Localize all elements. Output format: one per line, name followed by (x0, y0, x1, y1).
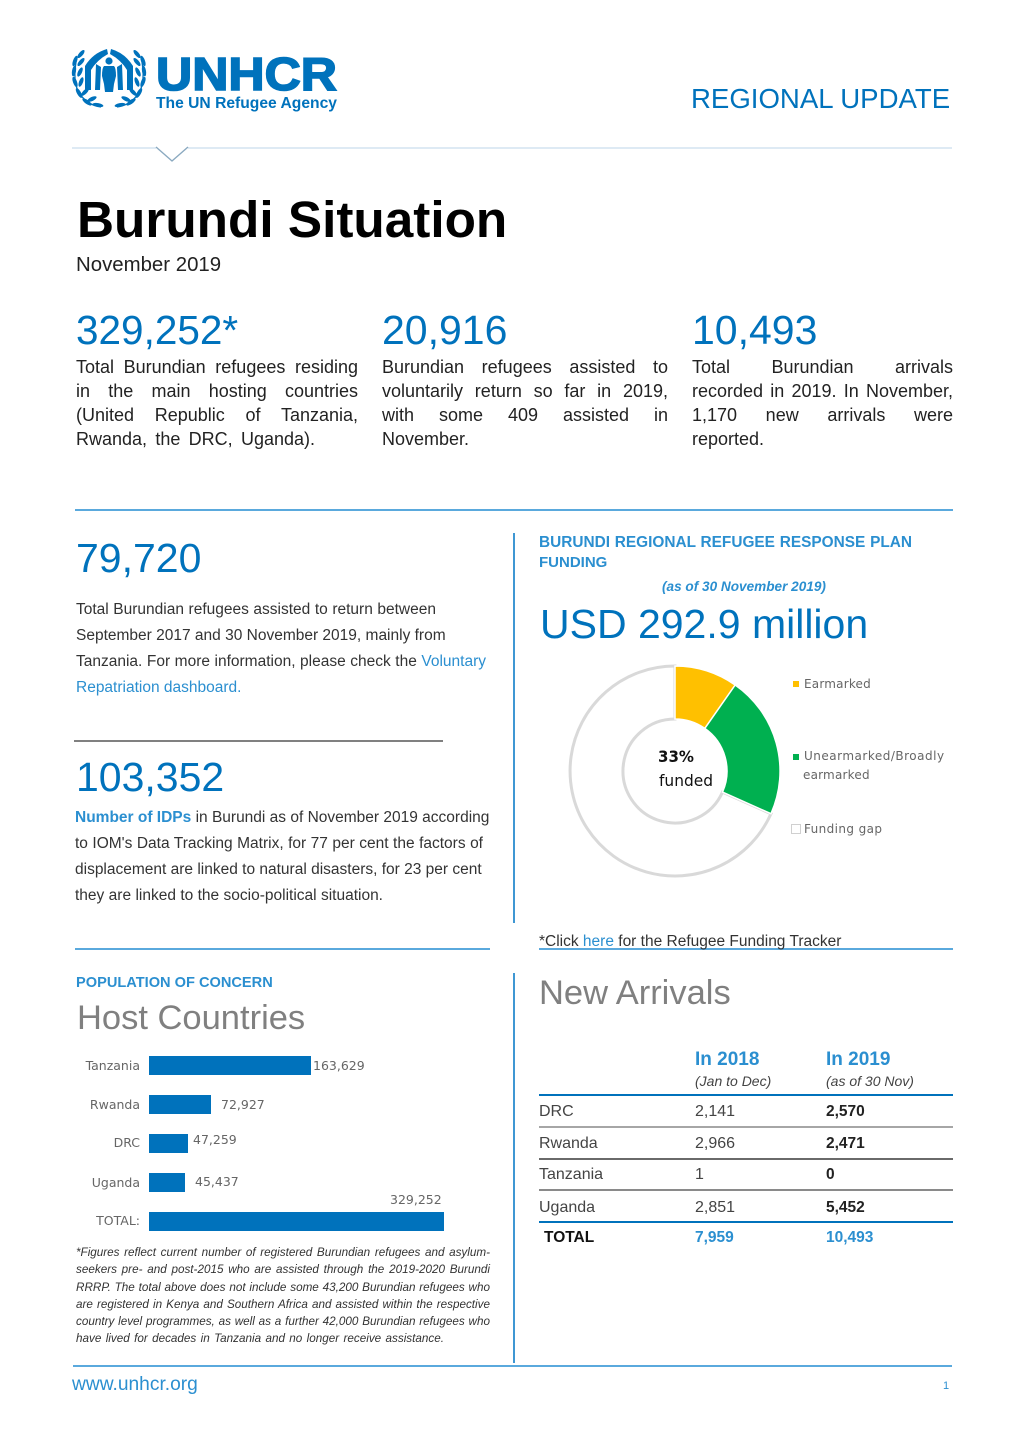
returns text: Tanzania. For more information, please check the Voluntary (76, 653, 486, 670)
donut centre label: funded (659, 771, 713, 790)
table: new arrivals: 1 (695, 1166, 704, 1183)
row total: TOTAL (544, 1229, 594, 1246)
key figure: refugees: 329,252* (76, 307, 238, 353)
donut legend: Funding gap (804, 822, 882, 836)
donut centre label (658, 747, 713, 790)
key figure: refugees (76, 307, 358, 449)
row DRC: DRC (539, 1103, 574, 1120)
panel: IDPs: 103,352 (76, 754, 224, 800)
returns text: Total Burundian refugees assisted to return between (76, 601, 436, 618)
Rwanda: Rwanda (90, 1097, 140, 1112)
table: new arrivals: 0 (826, 1166, 835, 1183)
table: new arrivals: 5,452 (826, 1199, 865, 1216)
footnote (76, 1246, 490, 1345)
bar chart: host countries: 163,629 (313, 1058, 365, 1073)
key figure: arrivals (692, 307, 953, 449)
legend: earmarked (793, 681, 799, 687)
key figure: arrivals: 10,493 (692, 307, 817, 353)
description (76, 357, 358, 449)
donut legend (791, 677, 945, 836)
as-of note: (as of 30 November 2019) (662, 579, 826, 594)
table: new arrivals: 2,471 (826, 1135, 865, 1152)
header: UNHCR logo (72, 48, 338, 112)
logo wordmark: The UN Refugee Agency (156, 95, 337, 112)
donut centre label: 33% (658, 747, 694, 766)
table: new arrivals (539, 1049, 953, 1246)
earmarked (675, 666, 735, 728)
key figure: returns (382, 307, 668, 449)
legend: gap (791, 824, 801, 834)
row Uganda: Uganda (539, 1199, 595, 1216)
bar chart: host countries (86, 1056, 444, 1231)
IDP text: displacement are linked to natural disasters, for 23 per cent (75, 861, 482, 878)
legend: unearmarked (793, 754, 799, 760)
panel: funding heading (539, 534, 912, 594)
Total: TOTAL: (96, 1213, 140, 1228)
description: voluntarily return so far in 2019, (382, 381, 668, 401)
icon: UNHCR emblem (71, 49, 147, 108)
date: November 2019 (76, 254, 221, 276)
regional update label: REGIONAL UPDATE (691, 83, 950, 114)
IDP text: they are linked to the socio-political situation. (75, 887, 383, 904)
panel: host countries heading (76, 975, 305, 1037)
table: new arrivals: 2,141 (695, 1103, 735, 1120)
footnote: country level programmes, as well as a further 42,000 Burundian refugees who (76, 1315, 490, 1328)
footnote: are registered in Kenya and Southern Africa and assisted within the respective (76, 1298, 490, 1311)
donut chart (568, 664, 780, 878)
Tanzania: Tanzania (86, 1058, 140, 1073)
footnote: have lived for decades in Tanzania and no longer receive assistance. (76, 1332, 444, 1345)
panel: host countries heading: POPULATION OF CONCERN (76, 975, 273, 991)
description: reported. (692, 429, 764, 449)
donut legend: Earmarked (804, 677, 871, 691)
description: Burundian refugees assisted to (382, 357, 668, 377)
bar chart: host countries: 329,252 (390, 1192, 442, 1207)
unearmarked (705, 685, 780, 814)
column header 2019: In 2019 (826, 1049, 890, 1070)
panel: assisted returns: 79,720 (76, 535, 201, 581)
DRC: DRC (114, 1135, 140, 1150)
description: Total Burundian arrivals (692, 357, 953, 377)
footnote: seekers pre- and post-2015 who are assisted through the 2019-2020 Burundi (76, 1263, 490, 1276)
table: new arrivals: 10,493 (826, 1229, 873, 1246)
returns text: Repatriation dashboard. (76, 679, 241, 696)
bar chart: host countries: 45,437 (195, 1174, 239, 1189)
panel: funding heading: BURUNDI REGIONAL REFUGEE RESPONSE PLAN (539, 534, 912, 551)
table: new arrivals: (as of 30 Nov) (826, 1073, 914, 1089)
funding gap (570, 666, 771, 876)
row Rwanda: Rwanda (539, 1135, 598, 1152)
row Tanzania: Tanzania (539, 1166, 603, 1183)
panel: IDPs (75, 754, 489, 904)
page number: 1 (943, 1380, 949, 1392)
description: Rwanda, the DRC, Uganda). (76, 429, 315, 449)
description: November. (382, 429, 469, 449)
panel: new arrivals heading: New Arrivals (539, 974, 731, 1012)
table: new arrivals: 7,959 (695, 1229, 734, 1246)
description: Total Burundian refugees residing (76, 357, 358, 377)
panel: assisted returns (76, 535, 486, 696)
description: recorded in 2019. In November, (692, 381, 953, 401)
funding total: USD 292.9 million (540, 601, 868, 647)
bar chart: host countries: 72,927 (221, 1097, 265, 1112)
footnote: *Figures reflect current number of registered Burundian refugees and asylum- (76, 1246, 490, 1259)
IDP text: to IOM's Data Tracking Matrix, for 77 per cent the factors of (75, 835, 483, 852)
key figure: returns: 20,916 (382, 307, 507, 353)
footer url: www.unhcr.org (72, 1374, 198, 1395)
description (692, 357, 953, 449)
funding tracker note: *Click here for the Refugee Funding Tracker (539, 933, 841, 950)
IDP text (75, 809, 489, 904)
returns text (76, 601, 486, 696)
panel: funding heading: FUNDING (539, 554, 607, 571)
column header 2018: In 2018 (695, 1049, 759, 1070)
table: new arrivals: 2,851 (695, 1199, 735, 1216)
donut legend: earmarked (803, 768, 870, 782)
table: new arrivals: 2,966 (695, 1135, 735, 1152)
returns text: September 2017 and 30 November 2019, mainly from (76, 627, 446, 644)
bar chart: host countries: 47,259 (193, 1132, 237, 1147)
header rule with chevron (72, 146, 952, 162)
table: new arrivals: 2,570 (826, 1103, 865, 1120)
Uganda: Uganda (92, 1175, 140, 1190)
title: Burundi Situation (77, 191, 507, 248)
IDP text: Number of IDPs in Burundi as of November 2019 according (75, 809, 489, 826)
footnote: RRRP. The total above does not include some 43,200 Burundian refugees who (76, 1281, 490, 1294)
table: new arrivals: (Jan to Dec) (695, 1073, 771, 1089)
description: in the main hosting countries (76, 381, 358, 401)
subheading: Host Countries (77, 999, 305, 1037)
description: (United Republic of Tanzania, (76, 405, 358, 425)
donut legend: Unearmarked/Broadly (804, 749, 945, 763)
description: with some 409 assisted in (382, 405, 668, 425)
description (382, 357, 668, 449)
description: 1,170 new arrivals were (692, 405, 953, 425)
logo wordmark: UNHCR (156, 48, 337, 100)
